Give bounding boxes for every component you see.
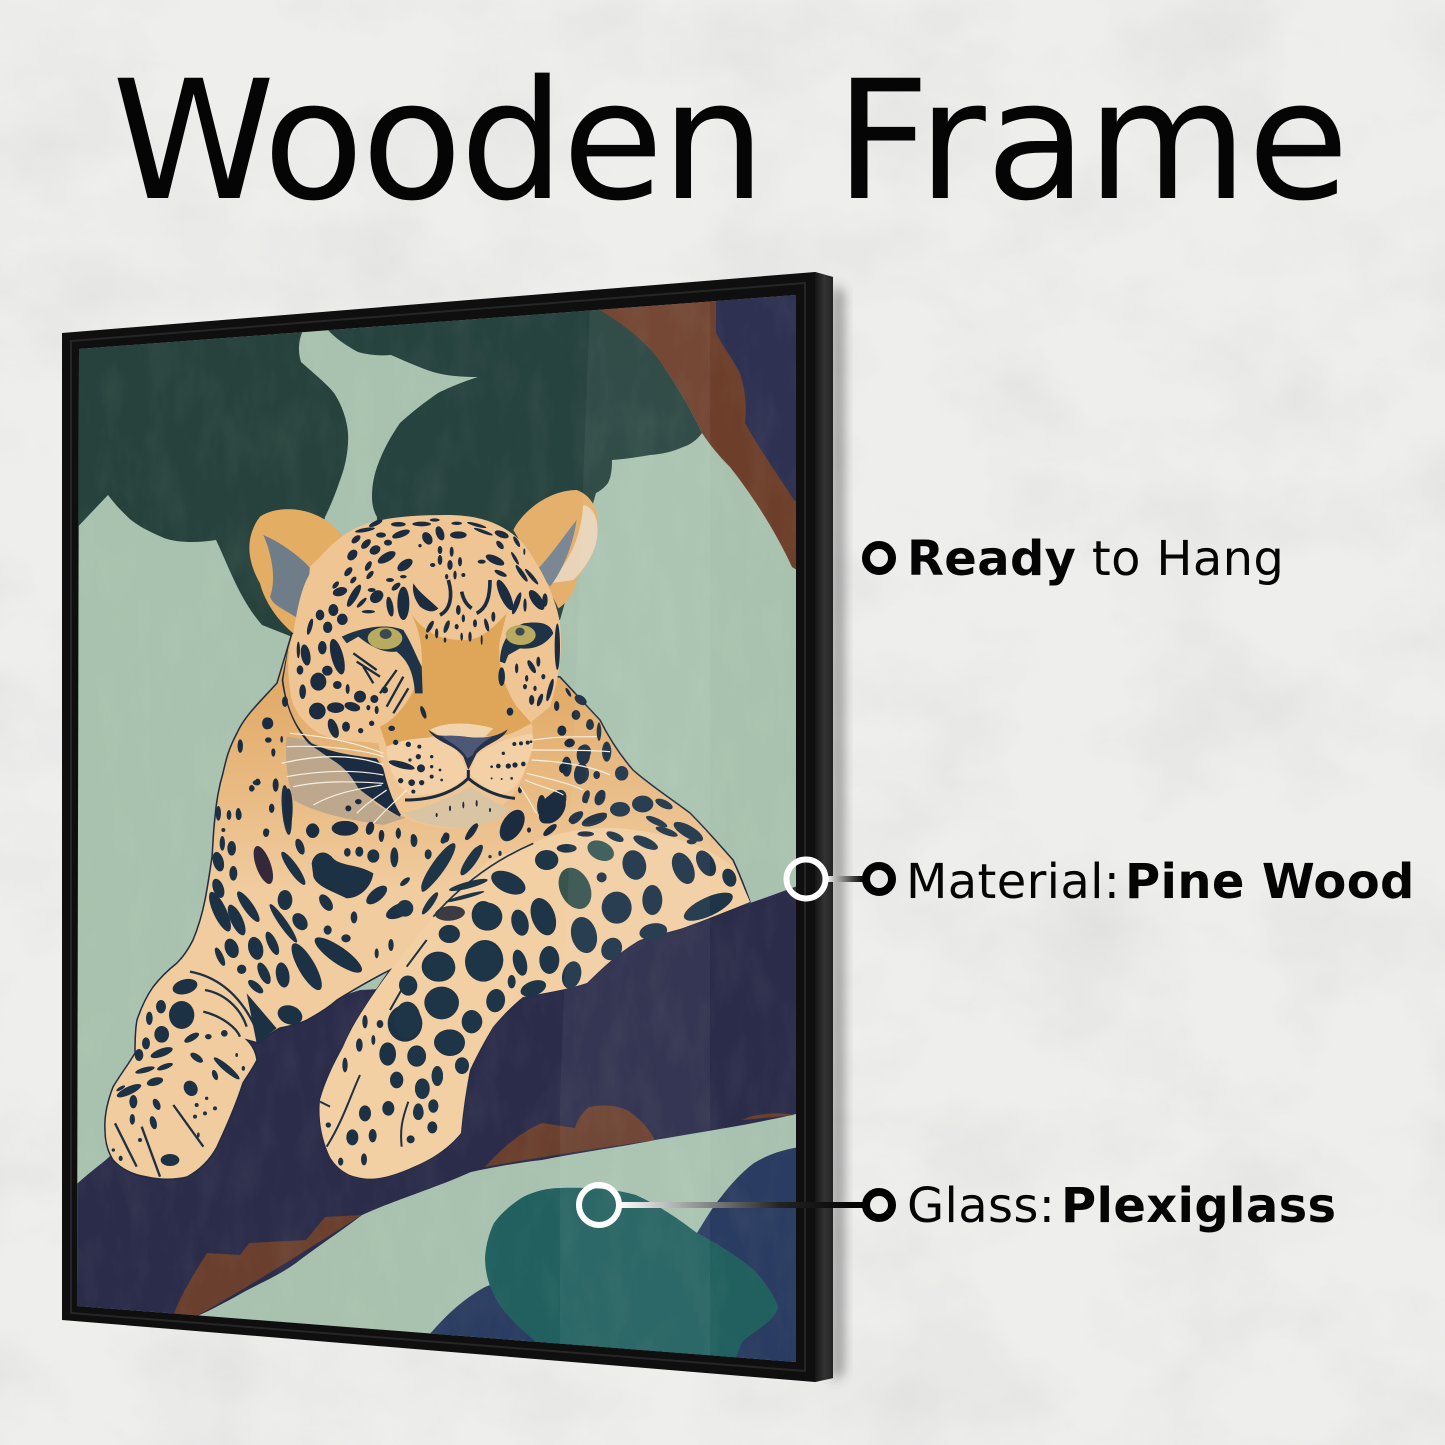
marker ring (866, 866, 892, 892)
marker ring (866, 1192, 892, 1218)
frame shadow (833, 285, 843, 1382)
head group (236, 490, 610, 844)
leopard (105, 490, 750, 1179)
connector line (618, 1202, 868, 1208)
marker ring (866, 545, 892, 571)
frame body (62, 272, 833, 1382)
mouth (405, 770, 515, 800)
whiskers (282, 733, 610, 823)
painting background (70, 290, 800, 1370)
branch bark patches (174, 1105, 794, 1317)
title: Wooden (112, 45, 763, 237)
orange nose bridge (380, 607, 532, 747)
painting (70, 290, 805, 1370)
nose (428, 729, 508, 770)
navy foliage (425, 1147, 800, 1370)
label: Glass: (907, 1178, 1055, 1234)
bottom foliage (425, 1147, 800, 1370)
white ring on frame (786, 860, 826, 898)
paint texture (164, 320, 662, 1079)
label: Ready to Hang (907, 531, 1284, 587)
label: Material: (906, 854, 1120, 910)
title: Frame (835, 45, 1349, 237)
dark foliage centre (327, 305, 702, 620)
leopard body (105, 633, 750, 1179)
nose fill (442, 736, 493, 758)
chin (403, 787, 509, 828)
right eye (500, 623, 553, 663)
left ear (249, 509, 342, 633)
left eye (342, 627, 423, 693)
main branch (70, 885, 800, 1317)
head spots (236, 518, 609, 844)
tree limb top right (598, 290, 800, 572)
connector line (824, 876, 868, 882)
left body spots (112, 717, 503, 1177)
label: Plexiglass (1061, 1178, 1336, 1234)
framed canvas (62, 272, 843, 1382)
callout: material (786, 854, 1415, 910)
neck shadow (282, 637, 407, 817)
teal foliage (485, 1188, 778, 1360)
pale nose top (430, 724, 493, 738)
dark foliage left (70, 330, 348, 640)
label: Pine Wood (1125, 854, 1415, 910)
face (288, 515, 561, 828)
muzzle (387, 733, 533, 795)
white ring on glass (579, 1185, 619, 1225)
right body and arm spots (394, 720, 739, 1120)
chest shading (286, 737, 407, 825)
callout: ready to hang (866, 531, 1284, 587)
glass reflection (560, 290, 710, 1360)
fore arm (319, 828, 750, 1179)
callout: glass (579, 1178, 1336, 1234)
right ear (513, 490, 598, 608)
